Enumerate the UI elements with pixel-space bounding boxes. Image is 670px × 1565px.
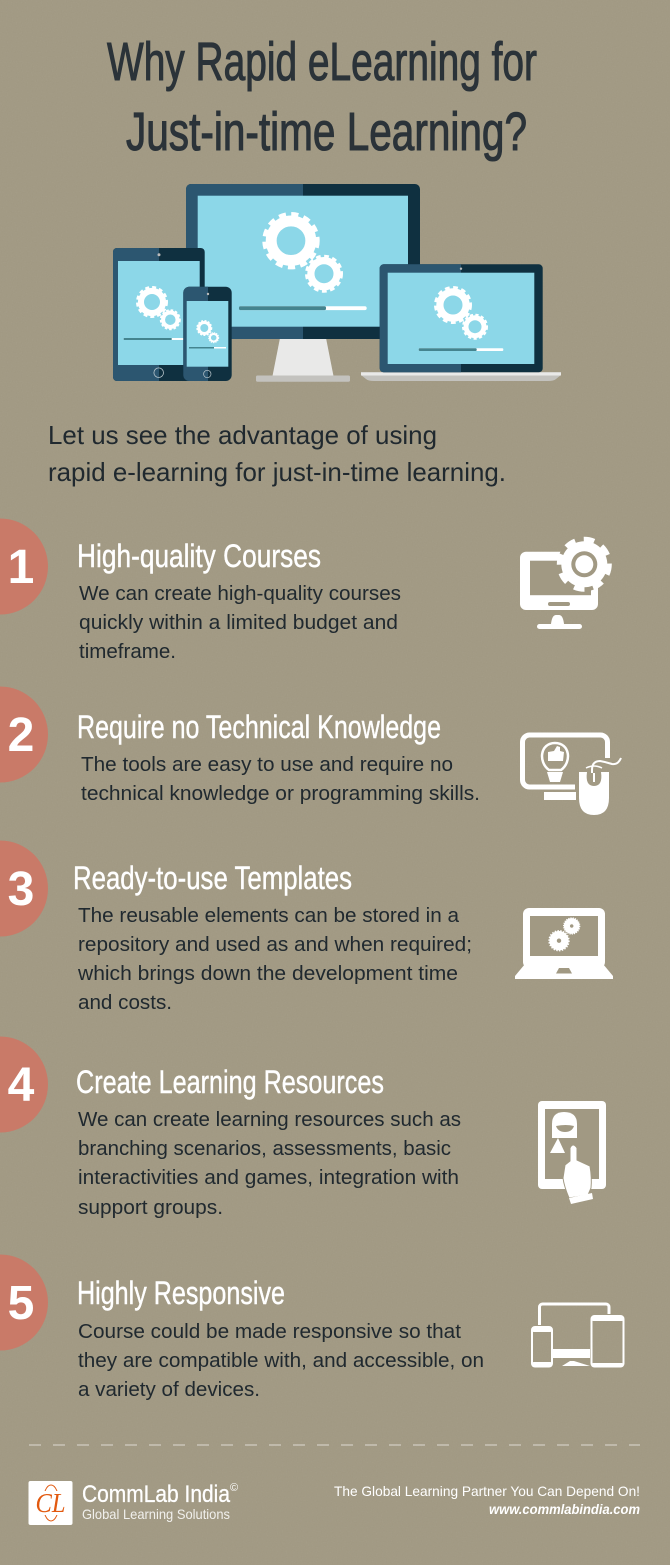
title (107, 32, 537, 162)
number badge 3 (0, 840, 48, 936)
icon: responsive devices (532, 1304, 624, 1367)
heading 3: Ready-to-use Templates (73, 860, 352, 896)
text block 1 (79, 583, 401, 663)
title: Just-in-time Learning? (126, 102, 527, 162)
heading 5: Highly Responsive (77, 1275, 285, 1311)
panel: item 5 highly responsive (0, 1254, 624, 1401)
text block 5: a variety of devices. (78, 1379, 260, 1401)
footer tagline and website: www.commlabindia.com (489, 1501, 640, 1517)
text block 5: Course could be made responsive so that (78, 1321, 461, 1343)
intro text (48, 420, 506, 487)
hero illustration: devices with gears (113, 184, 561, 382)
logo mark: CL (36, 1488, 66, 1518)
intro text: Let us see the advantage of using (48, 420, 437, 450)
icon: monitor with gear (520, 537, 611, 629)
text block 3: The reusable elements can be stored in a (78, 905, 460, 927)
text block 4: interactivities and games, integration with (78, 1167, 459, 1189)
heading 1: High-quality Courses (77, 538, 321, 574)
text block 3: repository and used as and when required; (78, 934, 472, 956)
footer tagline and website (334, 1483, 640, 1517)
text block 4: support groups. (78, 1197, 223, 1219)
icon: tablet with person and pointing hand (538, 1101, 606, 1204)
heading 4: Create Learning Resources (76, 1064, 384, 1100)
text block 5 (78, 1321, 484, 1401)
logo mark (28, 1481, 72, 1525)
text block 1: We can create high-quality courses (79, 583, 401, 605)
company name: CommLab India (82, 1481, 231, 1508)
tablet (113, 248, 205, 381)
text block 2 (81, 754, 480, 805)
text block 1: timeframe. (79, 641, 176, 663)
text block 1: quickly within a limited budget and (79, 612, 398, 634)
icon: monitor, bulb and mouse (522, 735, 621, 815)
panel: item 2 require no technical knowledge (0, 686, 621, 815)
text block 4: branching scenarios, assessments, basic (78, 1138, 451, 1160)
phone (183, 287, 232, 381)
text block 3: which brings down the development time (77, 963, 458, 985)
number badge 2: 2 (8, 709, 34, 762)
number badge 4: 4 (8, 1059, 35, 1112)
panel: item 4 create learning resources (0, 1036, 606, 1219)
number badge 4 (0, 1036, 48, 1132)
text block 3: and costs. (78, 992, 172, 1014)
desktop monitor (186, 184, 420, 382)
heading 2: Require no Technical Knowledge (77, 709, 441, 745)
number badge 1: 1 (8, 541, 34, 594)
text block 2: The tools are easy to use and require no (81, 754, 453, 776)
panel: item 3 ready-to-use templates (0, 840, 613, 1014)
panel: item 1 high-quality courses (0, 518, 611, 663)
footer tagline and website: The Global Learning Partner You Can Depend On! (334, 1483, 640, 1499)
number badge 2 (0, 686, 48, 782)
number badge 3: 3 (8, 863, 34, 916)
text block 4: We can create learning resources such as (78, 1109, 461, 1131)
number badge 5: 5 (8, 1277, 34, 1330)
number badge 5 (0, 1254, 48, 1350)
icon: laptop with gears (515, 908, 613, 979)
company tagline: Global Learning Solutions (82, 1506, 230, 1522)
laptop (361, 264, 561, 381)
text block 5: they are compatible with, and accessible, on (78, 1350, 484, 1372)
footer logo (28, 1481, 238, 1525)
number badge 1 (0, 518, 48, 614)
text block 4 (78, 1109, 461, 1219)
copyright mark: © (230, 1482, 238, 1494)
text block 2: technical knowledge or programming skills. (81, 783, 480, 805)
intro text: rapid e-learning for just-in-time learning. (48, 457, 506, 487)
text block 3 (77, 905, 472, 1014)
